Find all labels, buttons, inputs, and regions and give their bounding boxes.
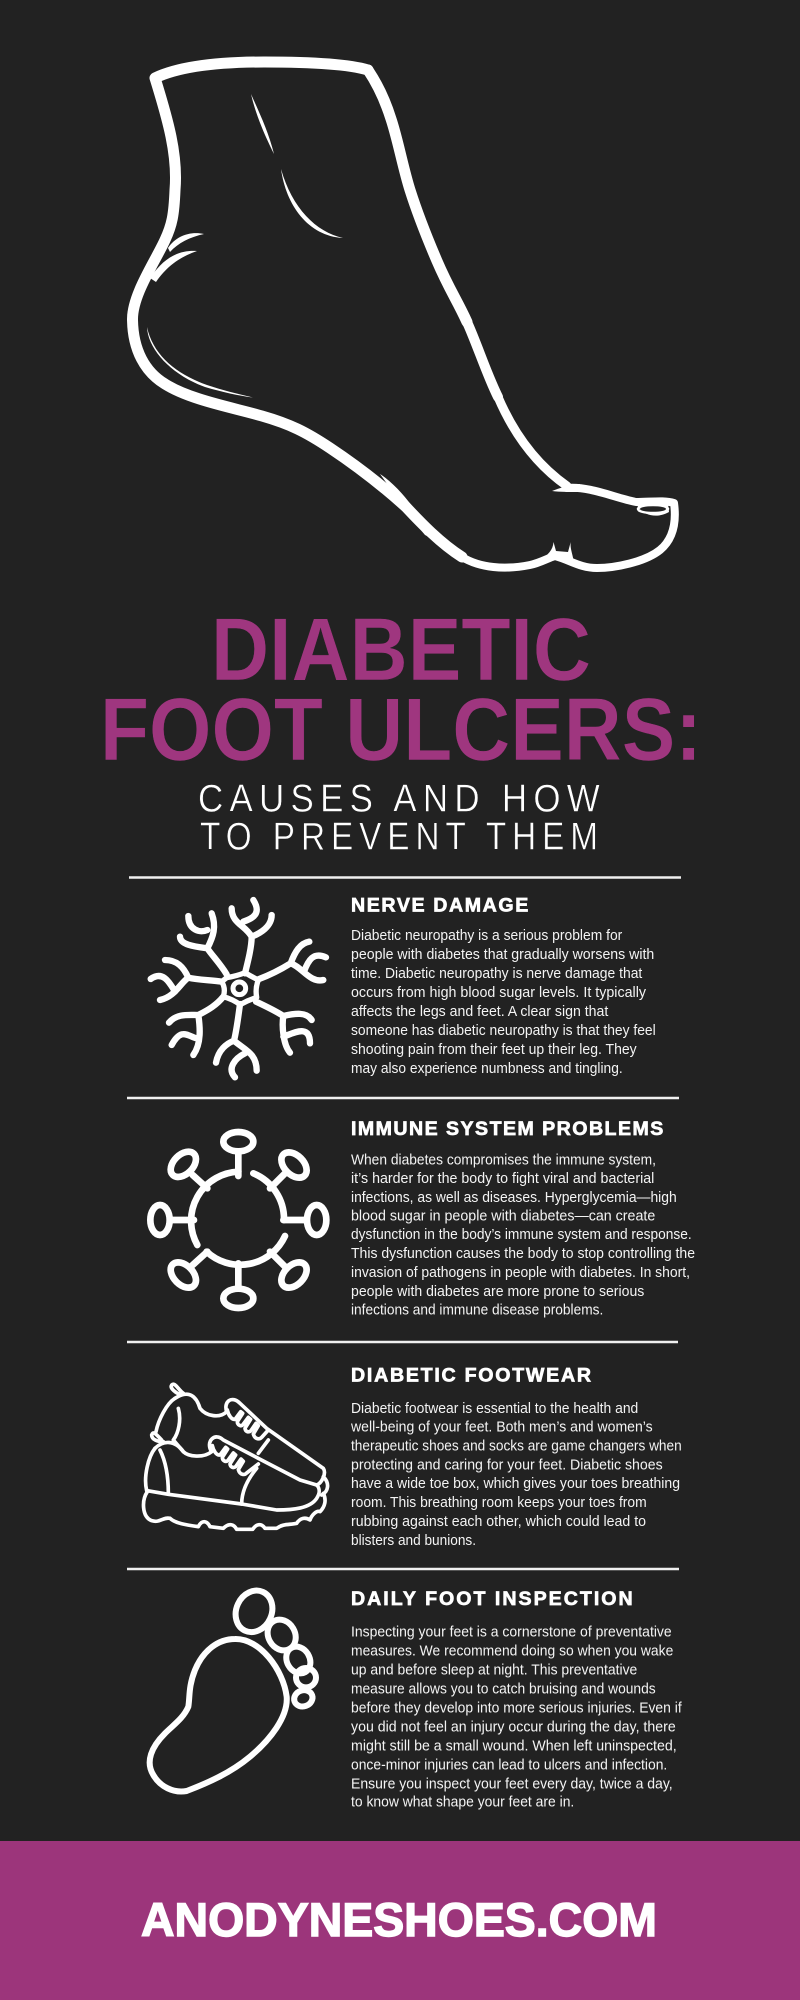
- footer website: ANODYNESHOES.COM: [141, 1894, 657, 1947]
- text block: nerve damage: may also experience numbness and tingling.: [351, 1060, 623, 1077]
- text block: nerve damage: time. Diabetic neuropathy is nerve damage that: [351, 965, 643, 982]
- text block: nerve damage: affects the legs and feet. A clear sign that: [351, 1003, 609, 1020]
- text block: diabetic footwear: protecting and caring for your feet. Diabetic shoes: [351, 1456, 663, 1473]
- panel: diabetic footwear: [144, 1364, 682, 1549]
- text block: daily foot inspection: you did not feel an injury occur during the day, there: [351, 1718, 676, 1735]
- text block: immune system problems: When diabetes compromises the immune system,: [351, 1151, 656, 1168]
- text block: daily foot inspection: [351, 1624, 682, 1811]
- subtitle: TO PREVENT THEM: [200, 816, 604, 858]
- heading: diabetic footwear: DIABETIC FOOTWEAR: [351, 1364, 591, 1386]
- text block: daily foot inspection: to know what shape your feet are in.: [351, 1794, 574, 1811]
- text block: daily foot inspection: up and before sleep at night. This preventative: [351, 1661, 637, 1678]
- title: DIABETIC: [211, 599, 591, 699]
- text block: nerve damage: shooting pain from their feet up their leg. They: [351, 1041, 637, 1058]
- icon: neuron: [151, 900, 326, 1077]
- text block: diabetic footwear: well-being of your feet. Both men’s and women’s: [350, 1418, 653, 1435]
- text block: immune system problems: people with diabetes are more prone to serious: [351, 1283, 644, 1300]
- text block: immune system problems: [351, 1151, 695, 1319]
- text block: immune system problems: dysfunction in the body’s immune system and response.: [351, 1226, 692, 1243]
- text block: nerve damage: [351, 927, 656, 1077]
- subtitle: [198, 778, 606, 858]
- text block: diabetic footwear: Diabetic footwear is essential to the health and: [351, 1400, 638, 1417]
- text block: diabetic footwear: [350, 1400, 682, 1549]
- heading: immune system problems: IMMUNE SYSTEM PROBLEMS: [351, 1118, 663, 1140]
- illustration: foot outline: [132, 62, 675, 568]
- text block: immune system problems: This dysfunction causes the body to stop controlling the: [351, 1245, 695, 1262]
- text block: diabetic footwear: room. This breathing room keeps your toes from: [351, 1494, 647, 1511]
- subtitle: CAUSES AND HOW: [198, 778, 606, 820]
- text block: daily foot inspection: measures. We recommend doing so when you wake: [351, 1642, 673, 1659]
- panel: daily foot inspection: [150, 1585, 682, 1811]
- text block: immune system problems: blood sugar in people with diabetes—can create: [351, 1207, 655, 1224]
- text block: diabetic footwear: blisters and bunions.: [351, 1532, 476, 1549]
- text block: daily foot inspection: measure allows you to catch bruising and wounds: [351, 1680, 656, 1697]
- text block: nerve damage: people with diabetes that gradually worsens with: [351, 946, 654, 963]
- heading: nerve damage: NERVE DAMAGE: [351, 894, 528, 916]
- footer band: [0, 1841, 800, 2000]
- icon: pair of shoes: [144, 1384, 328, 1529]
- text block: immune system problems: infections, as well as diseases. Hyperglycemia—high: [351, 1189, 677, 1206]
- text block: diabetic footwear: rubbing against each other, which could lead to: [351, 1513, 646, 1530]
- text block: daily foot inspection: before they develop into more serious injuries. Even if: [351, 1699, 682, 1716]
- text block: immune system problems: invasion of pathogens in people with diabetes. In short,: [351, 1264, 690, 1281]
- text block: nerve damage: Diabetic neuropathy is a serious problem for: [351, 927, 622, 944]
- heading: daily foot inspection: DAILY FOOT INSPECTION: [351, 1588, 633, 1610]
- text block: immune system problems: it’s harder for the body to fight viral and bacterial: [351, 1170, 654, 1187]
- icon: footprint: [150, 1585, 316, 1791]
- text block: daily foot inspection: once-minor injuries can lead to ulcers and infection.: [351, 1756, 667, 1773]
- text block: diabetic footwear: therapeutic shoes and socks are game changers when: [351, 1437, 682, 1454]
- title: [100, 599, 702, 779]
- title: FOOT ULCERS:: [100, 679, 702, 779]
- text block: nerve damage: someone has diabetic neuropathy is that they feel: [351, 1022, 656, 1039]
- text block: diabetic footwear: have a wide toe box, which gives your toes breathing: [351, 1475, 680, 1492]
- text block: daily foot inspection: Inspecting your feet is a cornerstone of preventative: [351, 1624, 672, 1641]
- text block: immune system problems: infections and immune disease problems.: [351, 1302, 603, 1319]
- panel: nerve damage: [151, 894, 656, 1077]
- text block: daily foot inspection: Ensure you inspect your feet every day, twice a day,: [351, 1775, 673, 1792]
- panel: immune system problems: [150, 1118, 695, 1319]
- icon: virus: [150, 1132, 326, 1308]
- text block: nerve damage: occurs from high blood sugar levels. It typically: [351, 984, 646, 1001]
- text block: daily foot inspection: might still be a small wound. When left uninspected,: [351, 1737, 677, 1754]
